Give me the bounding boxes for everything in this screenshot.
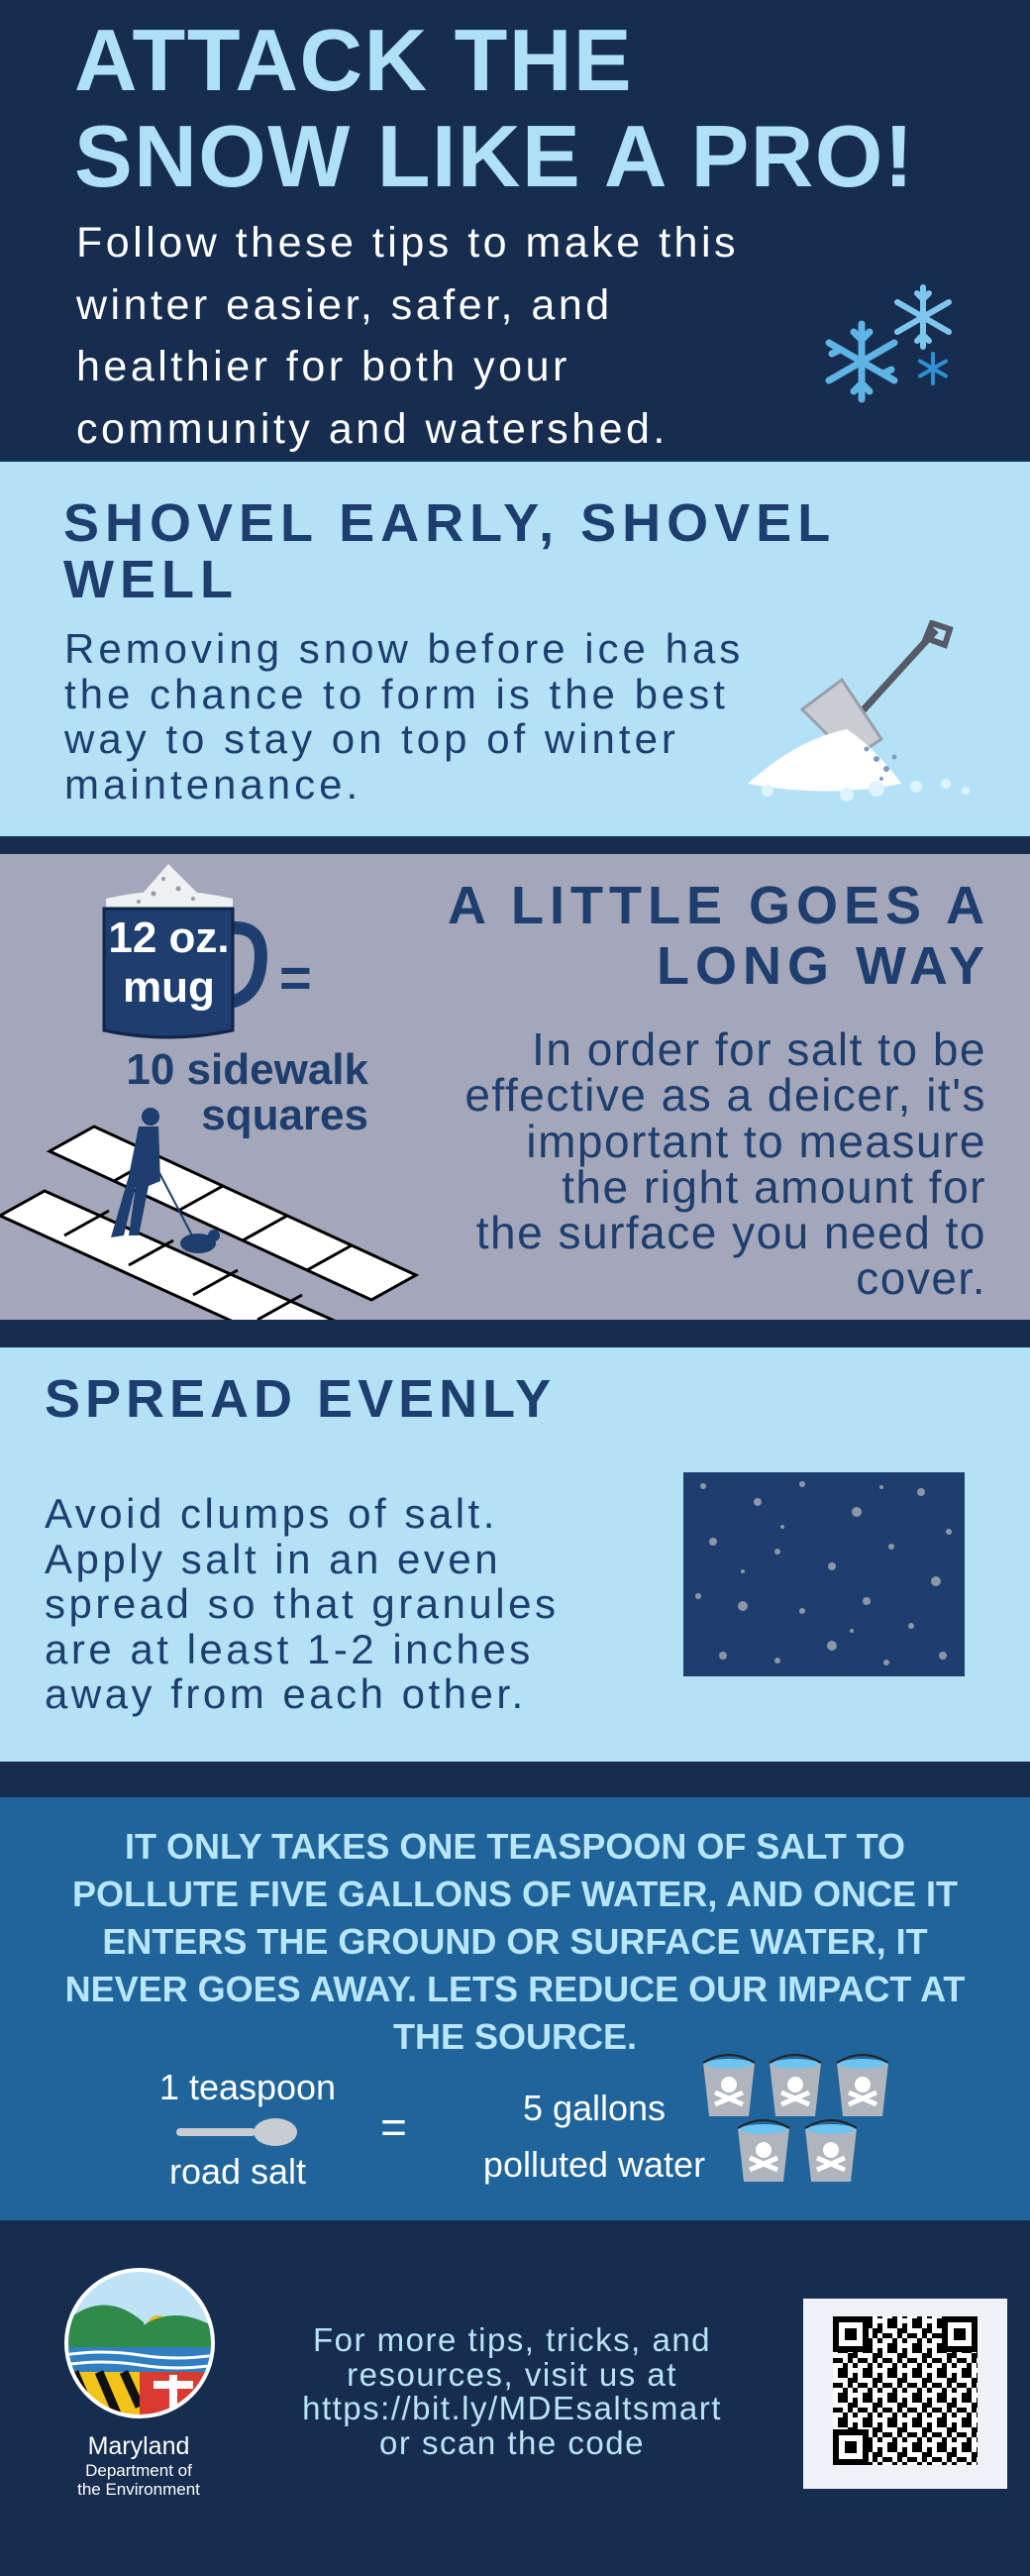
- heading: shovel early: [63, 493, 836, 609]
- text: shovel body: [64, 625, 744, 806]
- text: 10 sidewalk squares: [126, 1045, 368, 1139]
- text: shovel body: way to stay on top of winter: [64, 715, 679, 762]
- heading: a little goes a long way: [448, 876, 990, 996]
- icon: equals: =: [279, 946, 312, 1009]
- text: shovel body: Removing snow before ice has: [64, 625, 744, 672]
- text: spread body: Avoid clumps of salt.: [45, 1490, 498, 1537]
- text: 12 oz mug: mug: [123, 963, 215, 1012]
- icon: equals: =: [380, 2101, 407, 2153]
- text: measuring body: effective as a deicer, it's: [464, 1069, 986, 1121]
- text: spread body: spread so that granules: [45, 1580, 559, 1627]
- heading: shovel early: WELL: [63, 550, 239, 609]
- title: SNOW LIKE A PRO!: [74, 107, 915, 205]
- text: measuring body: [464, 1023, 986, 1304]
- text: more resources: resources, visit us at: [347, 2356, 677, 2392]
- text: more resources: For more tips, tricks, and: [313, 2321, 711, 2358]
- text: pollution fact: NEVER GOES AWAY. LETS REDUCE OUR IMPACT AT: [65, 1969, 965, 2009]
- text: spread body: [45, 1490, 559, 1717]
- icon: sidewalk with walker: [0, 1108, 420, 1320]
- panel: shovel early: [0, 462, 1030, 836]
- text: 1 teaspoon: 1 teaspoon: [159, 2067, 336, 2107]
- text: 12 oz mug: [108, 913, 230, 1012]
- icon: spoon: [176, 2118, 297, 2146]
- text: spread body: are at least 1-2 inches: [45, 1625, 534, 1672]
- heading: a little goes a long way: A LITTLE GOES A: [448, 876, 990, 935]
- footer panel: [64, 2268, 1007, 2495]
- text: measuring body: cover.: [856, 1252, 986, 1304]
- icon: snowflakes: [826, 284, 952, 402]
- text: spread body: away from each other.: [45, 1670, 527, 1717]
- text: Maryland Department of the Environment: Department of: [85, 2461, 192, 2480]
- text: measuring body: important to measure: [526, 1116, 986, 1167]
- panel: a little goes a long way: [0, 854, 1030, 1320]
- icon: shovel in snow: [748, 620, 970, 802]
- text: measuring body: the surface you need to: [476, 1207, 986, 1258]
- title: ATTACK THE: [74, 11, 633, 109]
- icon: salt mug: [103, 864, 267, 1038]
- title: [74, 11, 915, 205]
- header panel: [0, 0, 1030, 462]
- icon: polluted buckets: [703, 2054, 889, 2182]
- heading: spread evenly: SPREAD EVENLY: [45, 1369, 556, 1429]
- text: measuring body: the right amount for: [562, 1161, 986, 1213]
- text: pollution fact: THE SOURCE.: [393, 2016, 637, 2057]
- subtitle: winter easier, safer, and: [76, 281, 613, 329]
- icon: MDE logo: [64, 2268, 215, 2418]
- text: more resources: or scan the code: [379, 2423, 645, 2461]
- heading: shovel early: SHOVEL EARLY, SHOVEL: [63, 493, 836, 553]
- text: pollution fact: POLLUTE FIVE GALLONS OF WATER, AND ONCE IT: [72, 1874, 958, 1914]
- text: shovel body: the chance to form is the best: [64, 670, 729, 717]
- text: pollution fact: IT ONLY TAKES ONE TEASPOON OF SALT TO: [125, 1826, 905, 1867]
- text: road salt: road salt: [169, 2151, 306, 2192]
- icon: QR code: [803, 2299, 1007, 2489]
- text: 5 gallons polluted water: 5 gallons: [523, 2088, 666, 2128]
- subtitle: community and watershed.: [76, 404, 669, 452]
- panel: salt pollution fact: [0, 1797, 1030, 2220]
- text: 10 sidewalk squares: 10 sidewalk: [126, 1045, 368, 1094]
- text: more resources: [302, 2321, 722, 2461]
- text: more resources: https://bit.ly/MDEsaltsmart: [302, 2390, 722, 2426]
- text: pollution fact: ENTERS THE GROUND OR SURFACE WATER, IT: [102, 1921, 928, 1962]
- text: pollution fact: [65, 1826, 965, 2057]
- subtitle: healthier for both your: [76, 343, 570, 390]
- panel: spread evenly: [0, 1347, 1030, 1762]
- text: shovel body: maintenance.: [64, 761, 361, 806]
- subtitle: Follow these tips to make this: [76, 219, 739, 267]
- icon: salt granules on pavement: [683, 1472, 965, 1676]
- text: 5 gallons polluted water: polluted water: [483, 2144, 705, 2185]
- text: Maryland Department of the Environment: the Environment: [77, 2480, 200, 2499]
- text: 10 sidewalk squares: squares: [201, 1091, 368, 1139]
- text: Maryland Department of the Environment: Maryland: [88, 2432, 189, 2460]
- subtitle: [75, 219, 739, 452]
- text: spread body: Apply salt in an even: [45, 1536, 501, 1581]
- text: measuring body: In order for salt to be: [532, 1023, 986, 1075]
- text: 5 gallons polluted water: [483, 2088, 705, 2185]
- heading: a little goes a long way: LONG WAY: [657, 936, 990, 996]
- text: 12 oz mug: 12 oz.: [108, 913, 230, 962]
- text: Maryland Department of the Environment: [77, 2432, 200, 2499]
